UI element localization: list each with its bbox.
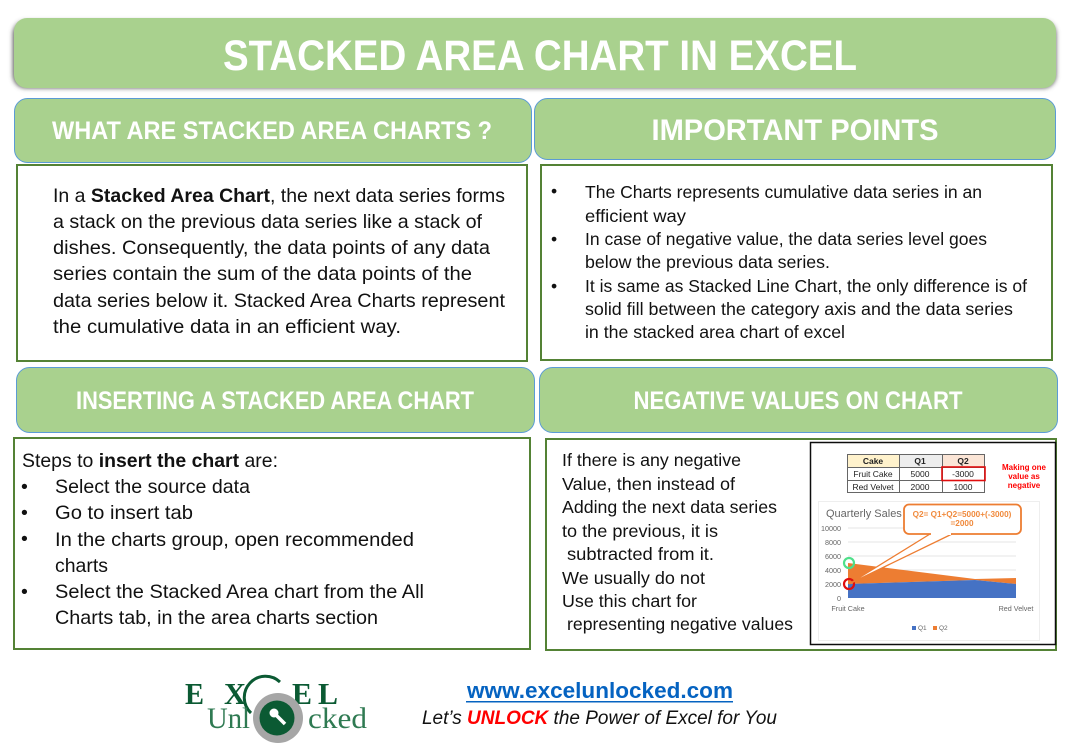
panel: negative values explanation: Adding the next data series — [562, 497, 777, 517]
heading: what are stacked area charts — [14, 98, 532, 162]
data table: -3000 — [952, 469, 974, 479]
tagline: Let’s UNLOCK the Power of Excel for You — [422, 708, 777, 729]
panel: important points list: • — [551, 181, 557, 201]
heading: what are stacked area charts: WHAT ARE STACKED AREA CHARTS ? — [52, 117, 492, 145]
data table: Red Velvet — [852, 482, 894, 492]
data table: Q2 — [957, 456, 969, 466]
panel: steps to insert the chart: Steps to insert the chart are: — [22, 450, 278, 472]
area chart: 0 — [837, 594, 841, 603]
area chart — [818, 502, 1040, 640]
panel: steps to insert the chart: charts — [55, 555, 108, 577]
area chart: 6000 — [825, 552, 841, 561]
area chart: Q1 — [918, 625, 927, 632]
panel: definition text: data series below it. Stacked Area Charts represent — [53, 290, 506, 312]
data table: 1000 — [954, 482, 973, 492]
panel: steps to insert the chart: • — [21, 476, 28, 498]
chart image: negative value example — [810, 442, 1056, 644]
logo: Excel Unlocked: E — [185, 676, 204, 711]
panel: important points list: below the previous data series. — [585, 252, 830, 272]
area chart: 8000 — [825, 538, 841, 547]
panel: steps to insert the chart: Go to insert tab — [55, 502, 193, 524]
panel: definition text: series contain the sum of the data points of the — [53, 263, 472, 285]
panel: important points list: in the stacked area chart of excel — [585, 322, 845, 342]
panel: important points list: The Charts represents cumulative data series in an — [585, 182, 982, 202]
panel: negative values explanation: to the previous, it is — [562, 521, 718, 541]
panel: negative values explanation: We usually do not — [562, 568, 705, 588]
heading: important points: IMPORTANT POINTS — [652, 114, 938, 147]
panel: important points list: In case of negative value, the data series level goes — [585, 229, 987, 249]
website link: www.excelunlocked.com — [466, 678, 733, 703]
title banner — [13, 18, 1056, 88]
data table: Fruit Cake — [853, 469, 893, 479]
panel: negative values explanation — [546, 439, 1056, 650]
panel: definition text: a stack on the previous data series like a stack of — [53, 211, 483, 233]
logo: Excel Unlocked — [185, 676, 367, 743]
logo: Excel Unlocked: E — [292, 676, 312, 711]
panel: steps to insert the chart — [14, 438, 530, 649]
data table: Q1 — [914, 456, 926, 466]
data table — [847, 454, 985, 492]
area chart: 10000 — [821, 524, 841, 533]
panel: negative values explanation: If there is any negative — [562, 450, 741, 470]
logo: Excel Unlocked: Unl — [207, 702, 250, 735]
panel: important points list: • — [551, 229, 557, 249]
note: making one value as negative: negative — [1008, 481, 1041, 490]
heading: inserting a stacked area chart: INSERTING A STACKED AREA CHART — [76, 387, 474, 415]
panel: steps to insert the chart: • — [21, 581, 28, 603]
callout: Q2 formula: Q2= Q1+Q2=5000+(-3000) — [913, 510, 1012, 519]
panel: steps to insert the chart: Charts tab, in the area charts section — [55, 607, 378, 629]
note: making one value as negative: Making one — [1002, 463, 1047, 472]
data table: Cake — [863, 456, 883, 466]
title banner: STACKED AREA CHART IN EXCEL — [223, 32, 857, 80]
data table: 2000 — [911, 482, 930, 492]
panel: steps to insert the chart: Select the Stacked Area chart from the All — [55, 581, 424, 603]
area chart: Quarterly Sales — [826, 508, 902, 520]
heading: negative values on chart: NEGATIVE VALUES ON CHART — [634, 387, 962, 415]
area chart: Fruit Cake — [831, 604, 865, 613]
panel: negative values explanation: Value, then instead of — [562, 474, 735, 494]
panel: important points list: efficient way — [585, 206, 686, 226]
area chart: Q2 — [939, 625, 948, 632]
panel: definition text — [17, 165, 527, 361]
panel: steps to insert the chart: • — [21, 528, 28, 550]
panel: definition text: the cumulative data in an efficient way. — [53, 316, 401, 338]
area chart: Red Velvet — [999, 604, 1033, 613]
panel: negative values explanation: subtracted from it. — [567, 544, 714, 564]
heading: important points — [534, 98, 1056, 160]
logo: Excel Unlocked: L — [318, 676, 338, 711]
area chart: 2000 — [825, 580, 841, 589]
panel: steps to insert the chart: Select the source data — [55, 476, 250, 498]
panel: steps to insert the chart: • — [21, 502, 28, 524]
panel: important points list: • — [551, 276, 557, 296]
callout: Q2 formula — [849, 504, 1021, 584]
note: making one value as negative — [1002, 463, 1047, 490]
heading: inserting a stacked area chart — [16, 368, 534, 432]
panel: steps to insert the chart: In the charts group, open recommended — [55, 529, 414, 551]
callout: Q2 formula: =2000 — [950, 519, 974, 528]
logo: Excel Unlocked: X — [224, 676, 247, 711]
area chart: 4000 — [825, 566, 841, 575]
note: making one value as negative: value as — [1008, 472, 1040, 481]
panel: definition text: dishes. Consequently, the data points of any data — [53, 237, 490, 259]
panel: important points list — [541, 165, 1052, 360]
logo: Excel Unlocked: cked — [308, 702, 367, 735]
panel: negative values explanation: Use this chart for — [562, 591, 697, 611]
panel: definition text: In a Stacked Area Chart, the next data series forms — [53, 185, 505, 207]
heading: negative values on chart — [540, 368, 1058, 432]
panel: important points list: It is same as Stacked Line Chart, the only difference is of — [585, 276, 1027, 296]
panel: important points list: solid fill between the category axis and the data series — [585, 299, 1013, 319]
panel: negative values explanation: representing negative values — [567, 614, 793, 634]
data table: 5000 — [911, 469, 930, 479]
